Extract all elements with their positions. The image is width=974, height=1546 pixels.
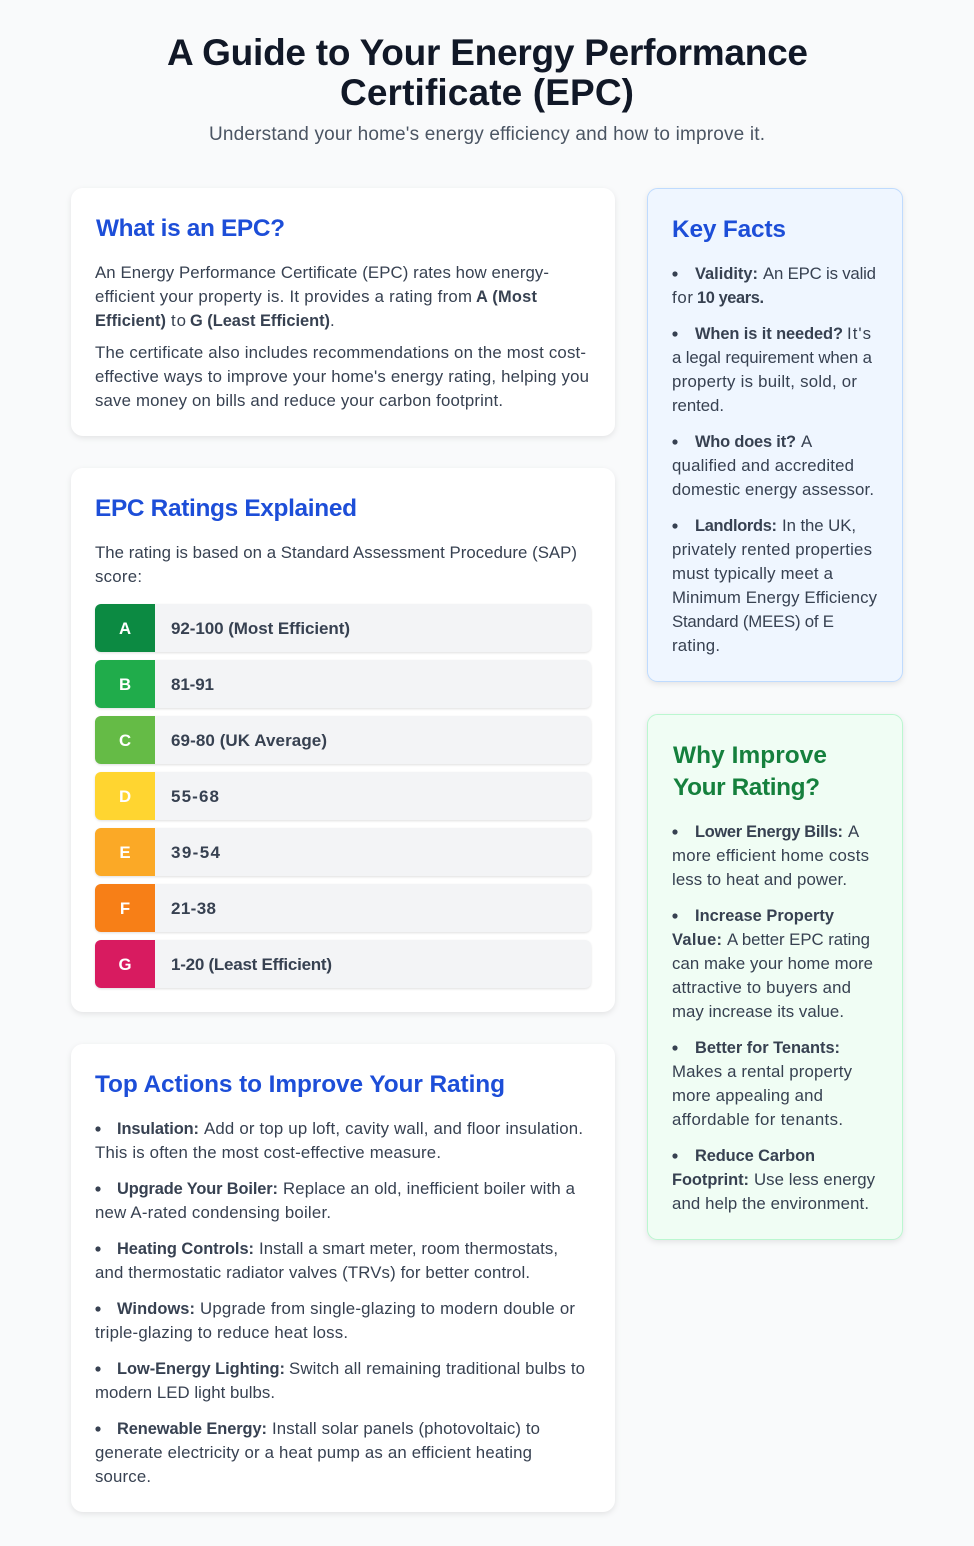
benefit: tenants: Better for Tenants:	[695, 1039, 840, 1057]
benefit: tenants: more appealing and	[672, 1086, 823, 1105]
heading: why improve: Why Improve	[673, 742, 827, 769]
rating bar B: 81-91	[171, 675, 214, 694]
action: boiler: new A-rated condensing boiler.	[95, 1203, 331, 1222]
subtitle: Understand your home's energy efficiency and how to improve it.	[209, 124, 765, 145]
fact: landlords: In the UK,	[782, 516, 856, 535]
action: lighting: modern LED light bulbs.	[95, 1383, 275, 1402]
action: heating controls: Install a smart meter, room thermostats,	[259, 1239, 558, 1258]
benefit: lower bills	[672, 822, 869, 889]
text block: EPC definition: A (Most	[476, 288, 538, 306]
action: lighting	[95, 1359, 585, 1402]
text block: EPC definition: efficient your property is. It provides a rating from	[95, 287, 472, 306]
rating bar D: D	[119, 787, 131, 806]
benefit: tenants: Makes a rental property	[672, 1062, 853, 1081]
rating bar C: C	[119, 731, 131, 750]
action: windows: Windows:	[117, 1300, 195, 1318]
text block: EPC definition: An Energy Performance Certificate (EPC) rates how energy-	[95, 263, 549, 282]
action: heating controls	[95, 1239, 558, 1282]
rating bar G	[95, 940, 591, 988]
benefit: lower bills: more efficient home costs	[672, 846, 869, 865]
action: windows	[95, 1299, 575, 1342]
text block: EPC definition: Efficient)	[95, 312, 166, 330]
page header	[167, 32, 808, 145]
benefit: property value: can make your home more	[672, 954, 873, 973]
fact: validity: Validity:	[695, 265, 758, 283]
action: heating controls: Heating Controls:	[117, 1240, 254, 1258]
benefit: lower bills: Lower Energy Bills:	[695, 823, 843, 841]
heading: EPC ratings explained: EPC Ratings Explained	[95, 495, 357, 522]
action: windows: Upgrade from single-glazing to modern double or	[200, 1299, 575, 1318]
action: renewable energy	[95, 1419, 540, 1486]
fact: landlords: privately rented properties	[672, 540, 872, 559]
rating bar F: 21-38	[171, 899, 216, 918]
benefit: carbon footprint: Use less energy	[754, 1170, 876, 1189]
fact: when needed	[672, 324, 873, 415]
fact: when needed: When is it needed?	[695, 325, 843, 343]
benefit: tenants: affordable for tenants.	[672, 1110, 843, 1129]
panel: why improve	[648, 714, 902, 1240]
text block: recommendations: The certificate also includes recommendations on the most cost-	[95, 343, 586, 362]
rating bar F	[95, 884, 591, 932]
rating bar E: E	[119, 843, 131, 862]
title: A Guide to Your Energy Performance	[167, 32, 808, 73]
fact: landlords: rating.	[672, 636, 720, 655]
benefit: property value: Increase Property	[695, 907, 835, 925]
heading: why improve: Your Rating?	[673, 774, 820, 801]
fact: who does it	[672, 432, 874, 499]
text block: recommendations	[95, 343, 589, 410]
text block: SAP intro: The rating is based on a Standard Assessment Procedure (SAP)	[95, 543, 577, 562]
fact: validity: for	[672, 288, 693, 307]
title	[167, 32, 808, 113]
fact: when needed: It's	[847, 324, 871, 343]
text block: SAP intro: score:	[95, 567, 142, 586]
fact: validity: An EPC is valid	[763, 264, 876, 283]
rating bar A: A	[119, 619, 131, 638]
action: windows: triple-glazing to reduce heat loss.	[95, 1323, 348, 1342]
text block: SAP intro	[95, 543, 577, 586]
benefit: lower bills: A	[848, 822, 860, 841]
text block: recommendations: effective ways to improve your home's energy rating, helping you	[95, 367, 589, 386]
action: insulation: Insulation:	[117, 1120, 199, 1138]
action: renewable energy: source.	[95, 1467, 151, 1486]
benefit: property value: may increase its value.	[672, 1002, 844, 1021]
benefit: tenants	[672, 1039, 853, 1129]
benefit: carbon footprint	[672, 1147, 876, 1213]
rating bar A	[95, 604, 591, 652]
action: boiler: Replace an old, inefficient boiler with a	[283, 1179, 576, 1198]
panel: top actions	[71, 1044, 615, 1512]
rating bar C: 69-80 (UK Average)	[171, 731, 327, 750]
benefit: property value: A better EPC rating	[727, 930, 870, 949]
text block: recommendations: save money on bills and reduce your carbon footprint.	[95, 391, 503, 410]
rating bar B: B	[119, 675, 131, 694]
fact: landlords: Standard (MEES) of E	[672, 612, 834, 631]
text block: EPC definition: G (Least Efficient)	[190, 312, 330, 330]
text block: EPC definition: .	[330, 311, 335, 330]
benefit: property value: attractive to buyers and	[672, 978, 851, 997]
rating bar C	[95, 716, 591, 764]
benefit: carbon footprint: and help the environment.	[672, 1194, 869, 1213]
heading: top actions: Top Actions to Improve Your Rating	[95, 1071, 505, 1098]
heading: key facts: Key Facts	[672, 216, 786, 243]
benefit: lower bills: less to heat and power.	[672, 870, 847, 889]
rating bar F: F	[120, 899, 130, 918]
text block: EPC definition: to	[171, 311, 186, 330]
action: boiler	[95, 1179, 576, 1222]
rating bar G: G	[118, 955, 132, 974]
title: Certificate (EPC)	[340, 72, 634, 113]
rating bar A: 92-100 (Most Efficient)	[171, 619, 350, 638]
heading: what is an EPC: What is an EPC?	[96, 215, 285, 242]
fact: when needed: a legal requirement when a	[672, 348, 873, 367]
action: renewable energy: generate electricity or a heat pump as an efficient heating	[95, 1443, 532, 1462]
rating bar E	[95, 828, 591, 876]
rating bar D	[95, 772, 591, 820]
rating bar D: 55-68	[171, 787, 219, 806]
fact: who does it: A	[801, 432, 813, 451]
fact: validity	[672, 264, 876, 307]
benefit: carbon footprint: Reduce Carbon	[695, 1147, 815, 1165]
action: renewable energy: Renewable Energy:	[117, 1420, 267, 1438]
rating bar B	[95, 660, 591, 708]
benefit: property value: Value:	[672, 931, 722, 949]
fact: who does it: domestic energy assessor.	[672, 480, 874, 499]
benefit: carbon footprint: Footprint:	[672, 1171, 749, 1189]
panel: EPC ratings explained	[71, 468, 615, 1012]
fact: when needed: rented.	[672, 396, 724, 415]
fact: when needed: property is built, sold, or	[672, 372, 857, 391]
text block: EPC definition	[95, 263, 549, 330]
action: boiler: Upgrade Your Boiler:	[117, 1180, 278, 1198]
action: lighting: Switch all remaining traditional bulbs to	[289, 1359, 585, 1378]
fact: landlords: must typically meet a	[672, 564, 834, 583]
rating bar E: 39-54	[171, 843, 221, 862]
action: insulation: Add or top up loft, cavity wall, and floor insulation.	[204, 1119, 583, 1138]
action: heating controls: and thermostatic radiator valves (TRVs) for better control.	[95, 1263, 530, 1282]
fact: landlords: Minimum Energy Efficiency	[672, 588, 878, 607]
action: insulation	[95, 1119, 583, 1162]
fact: landlords	[672, 516, 878, 655]
panel: key facts	[648, 188, 902, 682]
heading: why improve	[673, 742, 827, 801]
action: insulation: This is often the most cost-effective measure.	[95, 1143, 441, 1162]
fact: validity: 10 years.	[697, 289, 764, 307]
fact: who does it: qualified and accredited	[672, 456, 854, 475]
rating bar G: 1-20 (Least Efficient)	[171, 955, 332, 974]
panel: what is an EPC	[71, 188, 615, 436]
fact: who does it: Who does it?	[695, 433, 796, 451]
action: renewable energy: Install solar panels (photovoltaic) to	[272, 1419, 540, 1438]
action: lighting: Low-Energy Lighting:	[117, 1360, 285, 1378]
fact: landlords: Landlords:	[695, 517, 777, 535]
benefit: property value	[672, 907, 873, 1021]
